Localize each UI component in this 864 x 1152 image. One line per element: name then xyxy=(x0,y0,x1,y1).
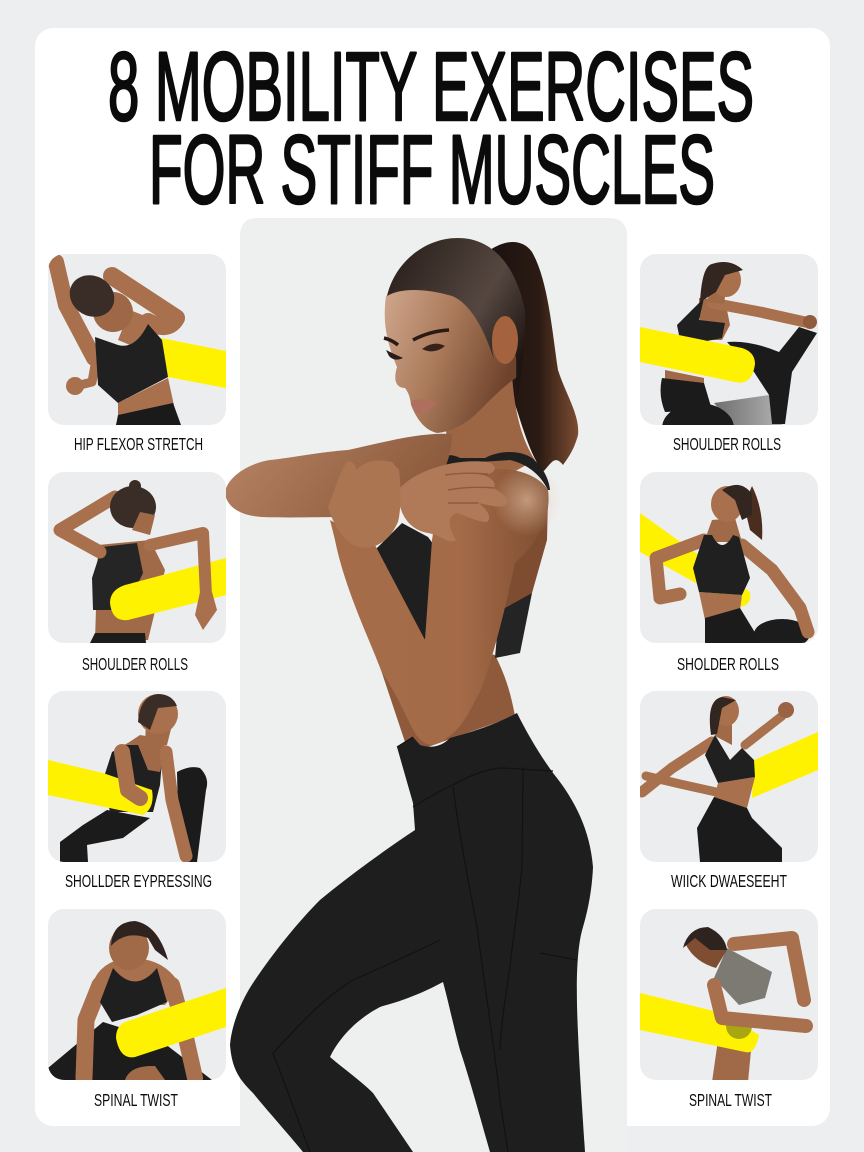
central panel xyxy=(240,218,627,1152)
card: spinal twist right xyxy=(640,909,818,1110)
label: SHOULDER ROLLS xyxy=(673,434,781,454)
photo: shoulder expressing xyxy=(48,694,207,862)
label: HIP FLEXOR STRETCH xyxy=(74,434,203,454)
label: SPINAL TWIST xyxy=(689,1090,772,1110)
photo: shoulder rolls left xyxy=(60,480,226,643)
ear xyxy=(492,316,518,364)
central figure xyxy=(225,238,593,1152)
bra strap xyxy=(422,452,550,490)
eyes and brows xyxy=(384,330,449,360)
bent arm xyxy=(330,469,549,745)
leggings xyxy=(230,713,593,1152)
gripping hand xyxy=(328,460,401,548)
card: shoulder expressing xyxy=(48,691,226,891)
photo: sholder rolls right xyxy=(640,485,810,649)
photo: hip flexor stretch xyxy=(56,262,226,425)
card: shoulder rolls left xyxy=(48,472,226,674)
back skin xyxy=(500,500,548,608)
finger creases xyxy=(445,473,494,503)
hair xyxy=(387,238,525,400)
hand on shoulder xyxy=(398,461,507,541)
sports bra xyxy=(372,523,532,658)
legging seams xyxy=(273,737,577,1152)
label: SHOULDER ROLLS xyxy=(82,654,188,674)
neck xyxy=(445,375,535,480)
label: WIICK DWAESEEHT xyxy=(671,871,787,891)
photo: shoulder rolls right top xyxy=(640,262,817,425)
photo: spinal twist left xyxy=(48,921,226,1080)
lips xyxy=(411,399,437,414)
label: SPINAL TWIST xyxy=(94,1090,178,1110)
card: hip flexor stretch xyxy=(48,254,226,454)
label: SHOLLDER EYPRESSING xyxy=(65,871,212,891)
face xyxy=(385,283,520,433)
card: sholder rolls right xyxy=(640,472,818,674)
shoulder highlight xyxy=(493,464,561,536)
midriff xyxy=(382,640,515,748)
card: wiick dwaeseeht xyxy=(640,691,818,891)
label: SHOLDER ROLLS xyxy=(677,654,779,674)
title xyxy=(108,32,754,224)
card: spinal twist left xyxy=(48,909,226,1110)
horizontal arm xyxy=(225,434,452,517)
card: shoulder rolls right top xyxy=(640,254,818,454)
ponytail xyxy=(490,242,578,472)
photo: wiick dwaeseeht xyxy=(642,696,818,862)
photo: spinal twist right xyxy=(640,927,806,1082)
